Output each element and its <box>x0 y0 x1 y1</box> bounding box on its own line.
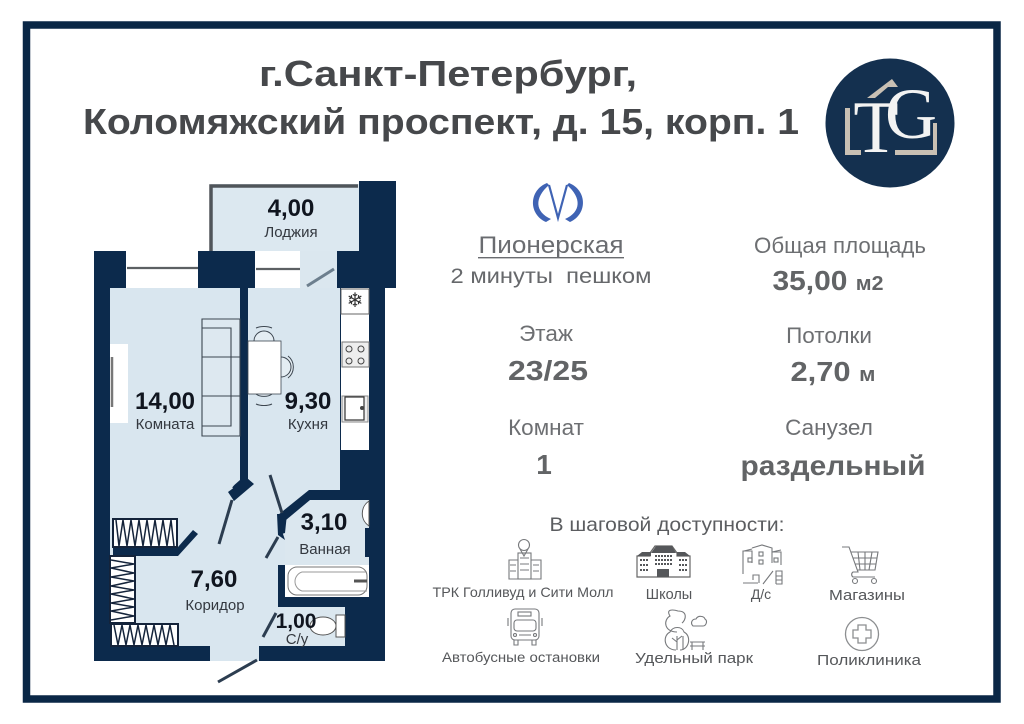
doors <box>218 475 282 682</box>
icon: bus <box>508 609 542 645</box>
stat: bathroom <box>740 415 926 481</box>
floor plan <box>94 181 396 682</box>
metro station <box>450 232 652 288</box>
area labels: Коридор <box>185 597 245 614</box>
icon: park <box>665 610 706 650</box>
bathtub <box>288 567 367 595</box>
label: clinic: Поликлиника <box>817 652 922 669</box>
stat: rooms: Комнат <box>508 415 584 440</box>
area labels <box>135 195 351 648</box>
stat: total area: Общая площадь <box>754 233 926 258</box>
stat: bathroom: раздельный <box>740 450 926 481</box>
loggia frame <box>211 186 358 251</box>
area labels: С/у <box>286 631 309 648</box>
icon: kindergarten <box>743 545 782 584</box>
stat: ceilings <box>786 323 876 387</box>
stat: total area: 35,00 м2 <box>772 265 884 296</box>
stat: rooms <box>508 415 584 480</box>
kitchen table <box>248 326 293 406</box>
area labels: 14,00 <box>135 388 195 415</box>
label: park: Удельный парк <box>635 650 753 667</box>
metro station: Пионерская <box>478 232 624 259</box>
loggia fill <box>211 184 361 254</box>
icon: cart <box>842 547 878 584</box>
sofa <box>202 319 240 436</box>
nearby heading: В шаговой доступности: <box>550 514 784 536</box>
balcony door <box>307 269 334 286</box>
bathroom floor <box>280 500 369 565</box>
wardrobes <box>110 519 178 646</box>
windows <box>126 250 198 288</box>
radiator/wardrobe in room <box>110 344 128 423</box>
label: mall: ТРК Голливуд и Сити Молл <box>432 584 614 600</box>
area labels: Ванная <box>299 541 351 558</box>
bath white <box>285 565 369 597</box>
area labels: 1,00 <box>276 610 316 633</box>
label: school: Школы <box>646 587 692 603</box>
area labels: 4,00 <box>268 195 314 222</box>
logo: TG: G <box>885 74 937 154</box>
title: Коломяжский проспект, д. 15, корп. 1 <box>83 101 799 142</box>
sink <box>362 501 369 526</box>
interior floor <box>110 288 340 661</box>
wardrobes wall <box>113 530 198 556</box>
label: bus stops: Автобусные остановки <box>442 650 600 665</box>
kitchen counter <box>341 288 369 450</box>
icon: mall <box>509 540 541 579</box>
stat: floor: Этаж <box>519 321 573 346</box>
area labels: Кухня <box>288 416 328 433</box>
area labels: 3,10 <box>301 509 347 536</box>
area labels: Лоджия <box>264 224 318 241</box>
icon: school <box>637 546 690 577</box>
metro icon <box>533 183 583 222</box>
stat: ceilings: Потолки <box>786 323 872 348</box>
logo: TG <box>826 58 954 188</box>
stat: ceilings: 2,70 м <box>790 356 876 387</box>
area labels: 9,30 <box>285 388 331 415</box>
title <box>83 53 799 142</box>
label: kindergarten: Д/с <box>751 586 771 602</box>
kitchen counter: ❄ <box>347 290 363 312</box>
stat: bathroom: Санузел <box>785 415 873 440</box>
toilet room floor <box>285 607 345 646</box>
label: shops: Магазины <box>829 587 905 604</box>
toilet <box>336 615 345 637</box>
wall stubs <box>228 478 287 535</box>
area labels: Комната <box>136 416 195 433</box>
icon: clinic <box>846 618 878 650</box>
title: г.Санкт-Петербург, <box>259 53 637 94</box>
stat: floor <box>508 321 588 386</box>
stat: floor: 23/25 <box>508 355 588 386</box>
metro station: 2 минуты пешком <box>450 265 652 288</box>
area labels: 7,60 <box>191 566 237 593</box>
walls <box>94 181 396 661</box>
logo: TG: T <box>853 87 899 169</box>
stat: total area <box>754 233 926 296</box>
stat: rooms: 1 <box>536 449 552 480</box>
